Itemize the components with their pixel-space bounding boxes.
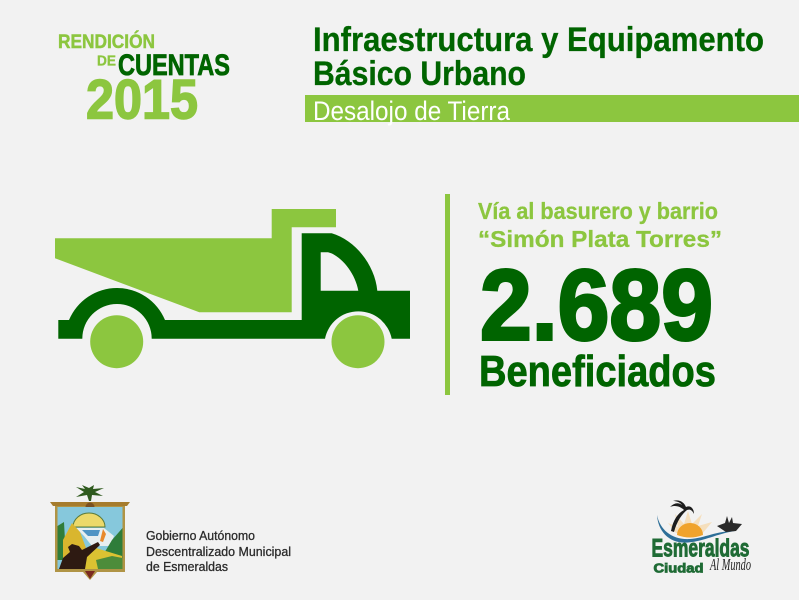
logo: Rendición de Cuentas 2015: DE xyxy=(97,52,116,70)
location text xyxy=(478,198,722,252)
icon: coat of arms xyxy=(50,485,130,580)
seal arc with sun xyxy=(73,513,105,527)
sun rays xyxy=(668,511,712,534)
shield top bar xyxy=(50,502,130,506)
shield point emblem xyxy=(85,571,95,579)
organisation name: Gobierno Autónomo xyxy=(146,528,255,543)
green patch xyxy=(96,556,122,569)
sun xyxy=(677,523,703,538)
logo: Rendición de Cuentas 2015: RENDICIÓN xyxy=(58,31,155,53)
location text: “Simón Plata Torres” xyxy=(478,226,722,252)
beneficiaries number: 2.689 xyxy=(480,250,713,362)
icon: dump truck xyxy=(55,209,410,368)
Esmeraldas wordmark: Esmeraldas xyxy=(652,534,750,562)
torch xyxy=(100,529,106,542)
organisation name xyxy=(146,528,291,574)
organisation name: de Esmeraldas xyxy=(146,559,228,574)
truck chassis and cab xyxy=(58,233,410,339)
yellow mound xyxy=(63,523,86,560)
wave xyxy=(657,515,735,543)
sky xyxy=(58,507,122,569)
yellow field xyxy=(66,548,122,569)
subtitle band: Desalojo de Tierra xyxy=(313,96,511,126)
logo: Rendición de Cuentas 2015: 2015 xyxy=(86,68,198,130)
left vegetation xyxy=(58,522,66,560)
palm tree xyxy=(670,500,694,532)
subtitle band xyxy=(305,95,799,126)
coconut cluster xyxy=(83,504,97,514)
logo: Esmeraldas Ciudad Al Mundo xyxy=(652,500,751,576)
nuts overlay xyxy=(86,502,94,512)
clouds and sea xyxy=(76,528,114,546)
front wheel xyxy=(332,315,384,368)
vertical divider xyxy=(445,194,450,395)
beneficiaries label: Beneficiados xyxy=(479,347,716,396)
figure xyxy=(59,542,100,569)
logo: Rendición de Cuentas 2015 xyxy=(58,31,230,130)
right vegetation xyxy=(100,528,122,560)
location text: Vía al basurero y barrio xyxy=(478,198,718,224)
truck bed xyxy=(55,209,336,312)
title: Básico Urbano xyxy=(313,55,526,93)
palm xyxy=(76,485,104,501)
Al Mundo script: Al Mundo xyxy=(709,555,751,574)
shield frame xyxy=(55,505,125,580)
title xyxy=(313,21,764,93)
Ciudad wordmark: Ciudad xyxy=(654,560,704,576)
title: Infraestructura y Equipamento xyxy=(313,21,764,59)
boat xyxy=(717,516,742,532)
organisation name: Descentralizado Municipal xyxy=(146,544,291,559)
logo: Rendición de Cuentas 2015: CUENTAS xyxy=(118,49,230,82)
rear wheel xyxy=(90,315,143,368)
